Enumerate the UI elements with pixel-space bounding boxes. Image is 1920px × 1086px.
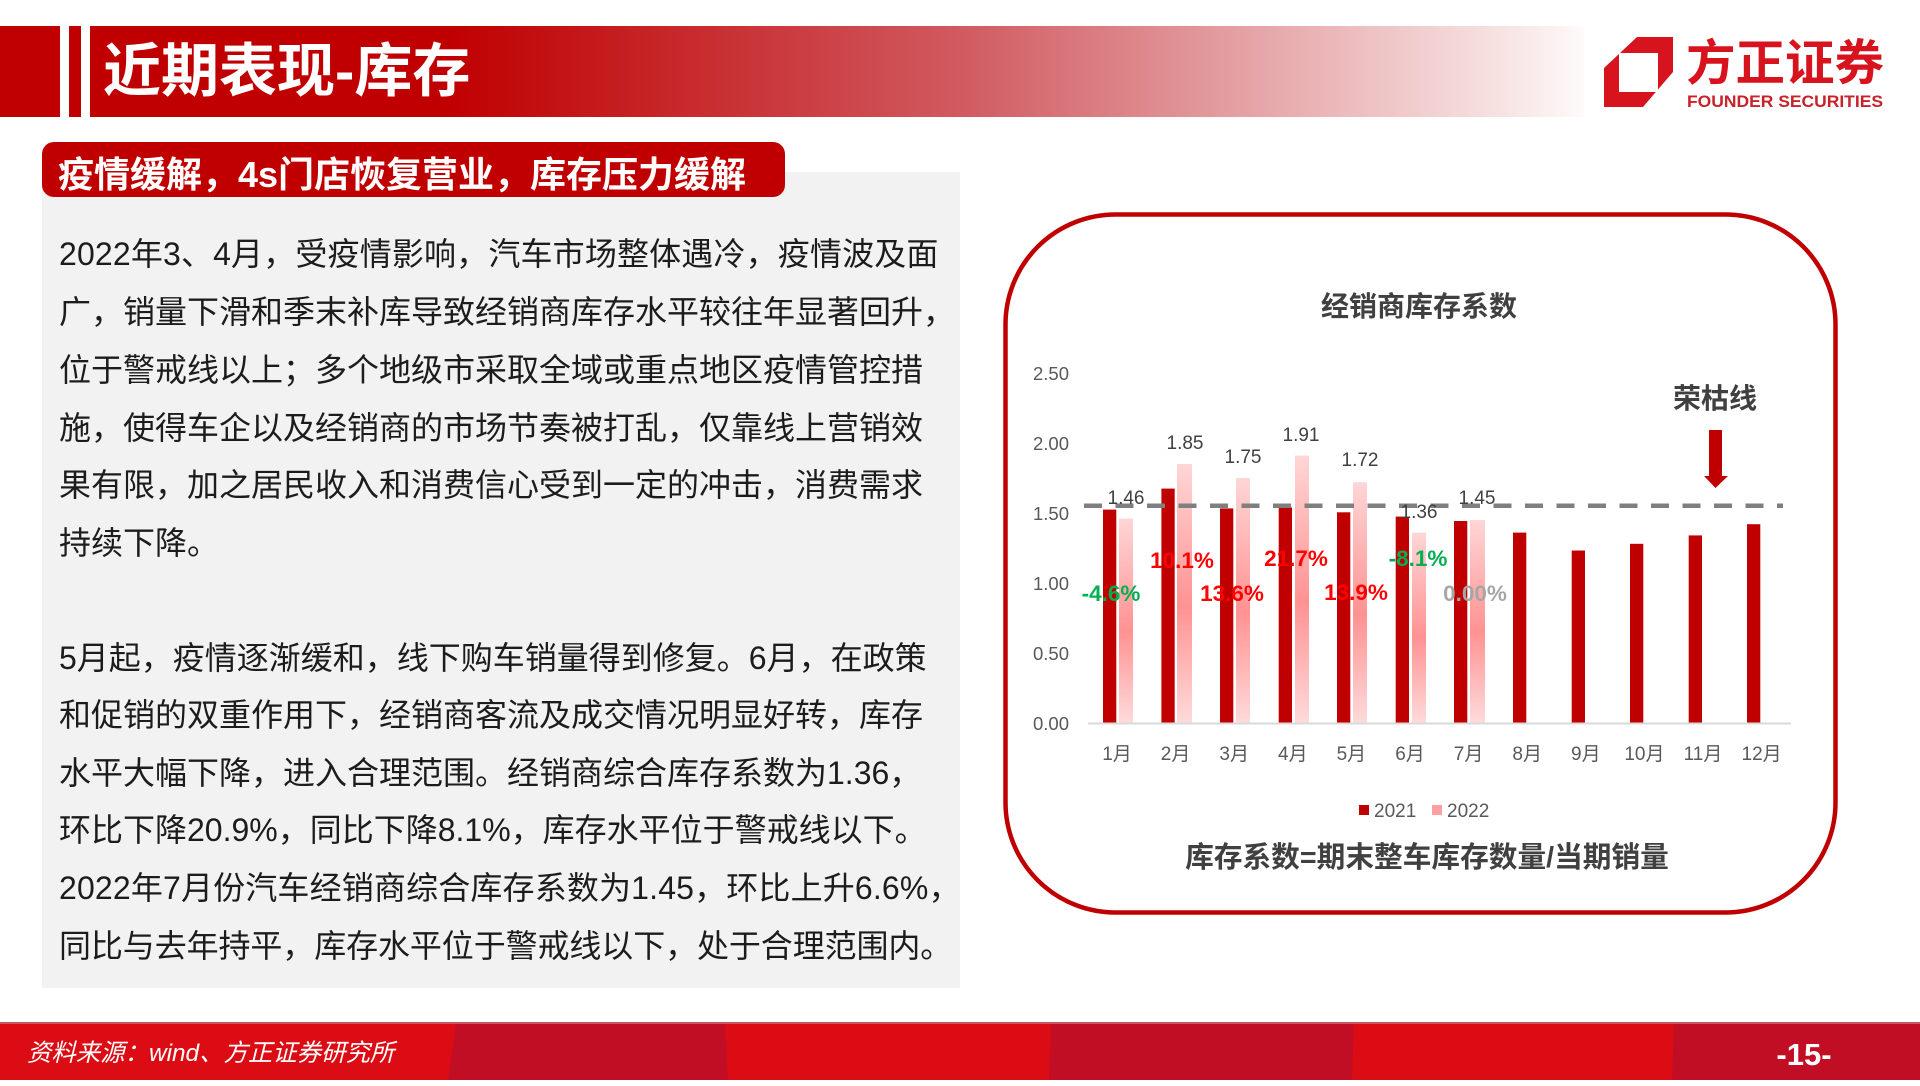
x axis labels: 8月 bbox=[1512, 744, 1542, 765]
chart title: 经销商库存系数 bbox=[1321, 291, 1517, 322]
y axis labels: 1.00 bbox=[1033, 573, 1069, 594]
x axis labels: 9月 bbox=[1571, 744, 1601, 765]
paragraph 2 bbox=[59, 640, 961, 964]
paragraph 1: 位于警戒线以上；多个地级市采取全域或重点地区疫情管控措 bbox=[59, 352, 923, 388]
panel: chart card bbox=[1003, 212, 1838, 915]
value labels 2022: 1.85 bbox=[1167, 433, 1203, 454]
legend bbox=[1359, 801, 1489, 822]
x axis labels: 11月 bbox=[1684, 744, 1722, 765]
x axis labels: 4月 bbox=[1278, 744, 1308, 765]
threshold label: 荣枯线 bbox=[1673, 383, 1757, 414]
value labels 2022: 1.36 bbox=[1401, 502, 1437, 523]
formula note: 库存系数=期末整车库存数量/当期销量 bbox=[1185, 842, 1669, 874]
paragraph 2: 2022年7月份汽车经销商综合库存系数为1.45，环比上升6.6%， bbox=[59, 870, 961, 906]
paragraph 1: 2022年3、4月，受疫情影响，汽车市场整体遇冷，疫情波及面 bbox=[59, 236, 939, 272]
title: 近期表现-库存 bbox=[103, 39, 470, 104]
x axis labels bbox=[1102, 744, 1782, 765]
paragraph 1: 施，使得车企以及经销商的市场节奏被打乱，仅靠线上营销效 bbox=[59, 410, 923, 446]
x axis labels: 7月 bbox=[1454, 744, 1483, 765]
value labels 2022: 1.45 bbox=[1459, 488, 1495, 509]
bar series 2022 bbox=[1119, 456, 1485, 723]
x axis labels: 2月 bbox=[1161, 744, 1190, 765]
year-on-year percentage labels: 13.6% bbox=[1200, 581, 1264, 606]
year-on-year percentage labels bbox=[1082, 546, 1507, 606]
value labels 2022: 1.72 bbox=[1342, 450, 1378, 471]
logo: Founder Securities bbox=[1604, 37, 1884, 111]
subtitle text: 疫情缓解，4s门店恢复营业，库存压力缓解 bbox=[58, 154, 746, 195]
logo wordmark: 方正证券 bbox=[1686, 37, 1884, 91]
x axis labels: 10月 bbox=[1624, 744, 1664, 765]
y axis labels bbox=[1033, 363, 1069, 734]
footer band bbox=[0, 1022, 1920, 1080]
subtitle bar bbox=[42, 142, 785, 197]
bar series 2021 bbox=[1103, 489, 1760, 723]
legend: 2021 bbox=[1374, 801, 1416, 822]
source note: 资料来源：wind、方正证券研究所 bbox=[27, 1040, 394, 1067]
paragraph 2: 和促销的双重作用下，经销商客流及成交情况明显好转，库存 bbox=[59, 697, 923, 733]
paragraph 1 bbox=[59, 236, 955, 561]
value labels 2022: 1.91 bbox=[1283, 425, 1319, 446]
x axis labels: 6月 bbox=[1395, 744, 1425, 765]
page number: -15- bbox=[1776, 1037, 1832, 1072]
y axis labels: 2.00 bbox=[1033, 433, 1069, 454]
value labels 2022: 1.75 bbox=[1225, 447, 1261, 468]
paragraph 1: 果有限，加之居民收入和消费信心受到一定的冲击，消费需求 bbox=[59, 467, 923, 503]
paragraph 2: 环比下降20.9%，同比下降8.1%，库存水平位于警戒线以下。 bbox=[59, 812, 927, 848]
header band bbox=[0, 26, 1574, 117]
x axis labels: 1月 bbox=[1102, 744, 1132, 765]
year-on-year percentage labels: 21.7% bbox=[1264, 546, 1328, 571]
icon: logo mark bbox=[1604, 37, 1673, 107]
year-on-year percentage labels: -4.6% bbox=[1082, 581, 1140, 606]
y axis labels: 1.50 bbox=[1033, 503, 1069, 524]
x axis labels: 5月 bbox=[1337, 744, 1366, 765]
value labels 2022: 1.46 bbox=[1108, 488, 1144, 509]
y axis labels: 0.00 bbox=[1033, 713, 1069, 734]
year-on-year percentage labels: 0.00% bbox=[1443, 581, 1507, 606]
paragraph 1: 广，销量下滑和季末补库导致经销商库存水平较往年显著回升， bbox=[59, 294, 955, 330]
panel: text body bbox=[42, 172, 960, 988]
x axis labels: 12月 bbox=[1742, 744, 1782, 765]
paragraph 2: 5月起，疫情逐渐缓和，线下购车销量得到修复。6月，在政策 bbox=[59, 640, 927, 676]
year-on-year percentage labels: 10.1% bbox=[1150, 548, 1214, 573]
paragraph 1: 持续下降。 bbox=[59, 525, 219, 561]
logo wordmark: FOUNDER SECURITIES bbox=[1687, 92, 1883, 111]
year-on-year percentage labels: -8.1% bbox=[1389, 546, 1447, 571]
value labels 2022 bbox=[1108, 425, 1495, 523]
year-on-year percentage labels: 13.9% bbox=[1324, 580, 1388, 605]
paragraph 2: 同比与去年持平，库存水平位于警戒线以下，处于合理范围内。 bbox=[59, 928, 952, 964]
x axis labels: 3月 bbox=[1219, 744, 1249, 765]
y axis labels: 0.50 bbox=[1033, 643, 1069, 664]
y axis labels: 2.50 bbox=[1033, 363, 1069, 384]
paragraph 2: 水平大幅下降，进入合理范围。经销商综合库存系数为1.36， bbox=[59, 755, 921, 791]
legend: 2022 bbox=[1447, 801, 1489, 822]
arrow: threshold pointer bbox=[1704, 430, 1728, 488]
